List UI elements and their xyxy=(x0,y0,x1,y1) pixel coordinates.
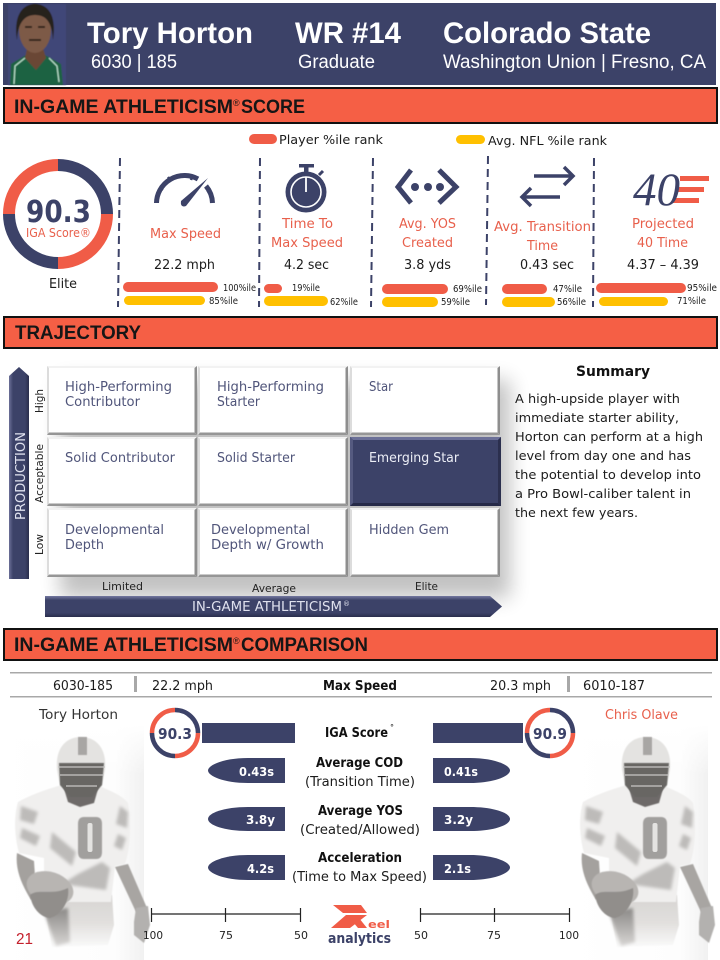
metric: time to max speed: 4.2 sec xyxy=(284,258,329,273)
trajectory matrix shadow xyxy=(60,380,510,598)
heading: in-game athleticism comparison: IN-GAME ATHLETICISM xyxy=(14,635,233,656)
metric: projected 40 time: 95%ile xyxy=(687,283,717,294)
player illustration: left xyxy=(15,737,150,947)
small donut: Tory Horton 90.3: 90.3 xyxy=(158,725,192,743)
metric: average transition time: 47%ile xyxy=(553,284,582,295)
summary xyxy=(515,364,703,520)
logo: reel analytics xyxy=(328,905,391,947)
summary: immediate starter ability, xyxy=(515,410,679,425)
cell: solid contributor: Solid Contributor xyxy=(65,451,176,466)
metric: projected 40 time: 4.37 – 4.39 xyxy=(627,258,699,273)
cell: solid contributor xyxy=(47,437,197,506)
class year: Graduate xyxy=(298,52,375,73)
comparison metric labels: ° xyxy=(390,723,394,732)
heading: in-game athleticism score xyxy=(4,88,717,123)
comparison bars: left player: 4.2s xyxy=(247,861,274,876)
player illustration: right xyxy=(580,737,715,947)
metric: projected 40 time: 40 Time xyxy=(637,236,688,251)
summary: a Pro Bowl-caliber talent in xyxy=(515,486,691,501)
comparison bars: left player xyxy=(208,758,285,880)
y axis tier labels: Low xyxy=(34,534,46,555)
cell: hidden gem xyxy=(350,508,500,577)
comparison metric labels: (Time to Max Speed) xyxy=(292,870,427,885)
heading: trajectory: TRAJECTORY xyxy=(15,323,141,344)
metric: average YOS created: 3.8 yds xyxy=(404,258,451,273)
metric: projected 40 time: Projected xyxy=(632,217,694,232)
player headshot xyxy=(8,4,66,85)
comparison header row xyxy=(10,672,712,698)
comparison metric labels: Average COD xyxy=(316,756,403,771)
metric: max speed: Max Speed xyxy=(150,227,221,242)
metric: average YOS created: 59%ile xyxy=(441,297,470,308)
right percentile axis xyxy=(414,908,579,942)
left percentile axis: 50 xyxy=(294,930,308,942)
cell: emerging star (highlighted): Emerging Star xyxy=(369,451,460,466)
x axis arrow: in-game athleticism xyxy=(45,596,502,617)
trajectory matrix xyxy=(47,366,501,577)
cell: developmental depth: Developmental xyxy=(65,523,164,538)
left percentile axis: 75 xyxy=(219,930,233,942)
y axis tier labels: High xyxy=(34,389,46,413)
cell: high-performing contributor xyxy=(47,366,197,435)
cell: star: Star xyxy=(369,380,394,395)
heading: in-game athleticism comparison xyxy=(4,629,717,660)
player names: Tory Horton xyxy=(38,708,118,723)
comparison metric labels: Average YOS xyxy=(318,804,403,819)
cell: solid starter: Solid Starter xyxy=(217,451,296,466)
metric: average transition time xyxy=(494,167,591,308)
x axis tier labels: Elite xyxy=(415,581,438,593)
metric: time to max speed: 19%ile xyxy=(292,283,320,294)
comparison bars: right player: 3.2y xyxy=(444,812,473,827)
cell: developmental depth xyxy=(47,508,197,577)
player name: Tory Horton xyxy=(87,17,253,50)
metric: average transition time: 56%ile xyxy=(557,297,586,308)
comparison bars: right player: 0.41s xyxy=(444,764,478,779)
cell: developmental depth with growth: Developmental xyxy=(211,523,310,538)
player names xyxy=(38,708,678,723)
metric: average transition time: 0.43 sec xyxy=(520,258,574,273)
cell: developmental depth with growth: Depth w/ Growth xyxy=(211,538,324,553)
page number: 21 xyxy=(16,931,33,948)
logo: reel analytics: analytics xyxy=(328,931,391,947)
icon: stopwatch xyxy=(286,164,326,212)
IGA score bars xyxy=(202,723,523,743)
comparison metric labels: Acceleration xyxy=(318,851,402,866)
y axis tier labels: Acceptable xyxy=(34,444,46,503)
comparison header row: 6030-185 xyxy=(53,679,113,694)
small donut: Chris Olave 90.9 xyxy=(523,706,577,760)
IGA score donut xyxy=(9,165,107,292)
icon: 40 with speed lines: 40 xyxy=(633,164,680,216)
x axis tier labels xyxy=(102,581,438,595)
comparison header row: 22.2 mph xyxy=(152,679,213,694)
metric: projected 40 time xyxy=(596,164,717,307)
icon: speedometer xyxy=(156,175,212,206)
right percentile axis: 50 xyxy=(414,930,428,942)
left percentile axis xyxy=(143,908,308,942)
summary: level from day one and has xyxy=(515,448,691,463)
header banner xyxy=(3,3,716,85)
comparison header row: 20.3 mph xyxy=(490,679,551,694)
metric: average YOS created xyxy=(382,170,482,308)
cell: star xyxy=(350,366,500,435)
metric: average YOS created: Avg. YOS xyxy=(399,217,456,232)
legend: Player %ile rank xyxy=(279,132,384,147)
legend: Avg. NFL %ile rank xyxy=(488,133,608,148)
left percentile axis: 100 xyxy=(143,930,163,942)
cell: developmental depth with growth xyxy=(198,508,348,577)
position: WR #14 xyxy=(295,17,401,50)
right percentile axis: 75 xyxy=(487,930,501,942)
small donut: Chris Olave 90.9: 90.9 xyxy=(533,725,567,743)
comparison bars: left player: 3.8y xyxy=(246,812,275,827)
heading: in-game athleticism score: ® xyxy=(233,98,240,108)
right percentile axis: 100 xyxy=(559,930,579,942)
IGA score donut: IGA Score® xyxy=(26,226,91,240)
cell: high-performing contributor: High-Performing xyxy=(65,380,172,395)
x axis tier labels: Average xyxy=(252,583,296,595)
cell: emerging star (highlighted) xyxy=(350,437,501,506)
icon: 40 with speed lines xyxy=(633,164,709,216)
metric: time to max speed: Max Speed xyxy=(271,236,343,251)
cell: developmental depth: Depth xyxy=(65,538,104,553)
heading: in-game athleticism comparison: COMPARISON xyxy=(241,635,368,656)
summary: Horton can perform at a high xyxy=(515,429,703,444)
logo: reel analytics: eel xyxy=(368,918,390,931)
comparison header row: Max Speed xyxy=(323,679,397,694)
x axis tier labels: Limited xyxy=(102,581,143,593)
x axis arrow: in-game athleticism: ® xyxy=(343,600,350,608)
metric: projected 40 time: 71%ile xyxy=(677,296,706,307)
icon: transition arrows xyxy=(522,167,573,206)
comparison bars: right player: 2.1s xyxy=(444,861,471,876)
metric: max speed: 22.2 mph xyxy=(154,258,215,273)
comparison metric labels: (Created/Allowed) xyxy=(300,823,420,838)
comparison metric labels: (Transition Time) xyxy=(305,775,415,790)
metric: average YOS created: Created xyxy=(402,236,453,251)
height and weight: 6030 | 185 xyxy=(91,52,177,73)
metric: average transition time: Avg. Transition xyxy=(494,220,591,235)
small donut: Tory Horton 90.3 xyxy=(148,706,202,760)
IGA score donut: 90.3 xyxy=(26,195,91,230)
comparison metric labels: IGA Score xyxy=(325,726,388,741)
y axis arrow: production: PRODUCTION xyxy=(14,432,29,520)
y axis tier labels xyxy=(34,389,46,555)
heading: in-game athleticism score: IN-GAME ATHLETICISM xyxy=(14,97,233,118)
cell: solid starter xyxy=(198,437,348,506)
heading: in-game athleticism comparison: ® xyxy=(233,636,240,646)
comparison bars: left player: 0.43s xyxy=(239,764,274,779)
cell: high-performing starter: Starter xyxy=(217,395,261,410)
player names: Chris Olave xyxy=(605,708,678,723)
IGA score donut: Elite xyxy=(49,277,77,292)
cell: high-performing starter xyxy=(198,366,348,435)
metric: time to max speed: Time To xyxy=(281,217,333,232)
summary: A high-upside player with xyxy=(515,391,680,406)
metric: average transition time: Time xyxy=(526,239,558,254)
summary: the potential to develop into xyxy=(515,467,701,482)
comparison header row: 6010-187 xyxy=(583,679,645,694)
metric: time to max speed xyxy=(264,164,358,308)
heading: in-game athleticism score: SCORE xyxy=(241,97,305,118)
metric: time to max speed: 62%ile xyxy=(330,297,358,308)
high school and hometown: Washington Union | Fresno, CA xyxy=(443,52,706,73)
comparison backdrop right xyxy=(570,725,708,960)
metric: max speed xyxy=(123,175,256,307)
y axis arrow: production xyxy=(9,367,29,579)
dashed column dividers xyxy=(118,156,594,307)
comparison bars: right player xyxy=(433,758,510,880)
comparison backdrop left xyxy=(0,725,144,960)
summary: the next few years. xyxy=(515,505,638,520)
legend xyxy=(249,132,608,148)
heading: trajectory xyxy=(4,317,717,348)
cell: high-performing contributor: Contributor xyxy=(65,395,141,410)
metric: average YOS created: 69%ile xyxy=(453,284,482,295)
metric: max speed: 100%ile xyxy=(223,283,256,294)
cell: high-performing starter: High-Performing xyxy=(217,380,324,395)
summary: Summary xyxy=(576,364,651,380)
x axis arrow: in-game athleticism: IN-GAME ATHLETICISM xyxy=(192,600,342,615)
icon: chevrons and dots xyxy=(398,170,456,203)
school: Colorado State xyxy=(443,17,651,50)
comparison metric labels xyxy=(292,723,427,885)
cell: hidden gem: Hidden Gem xyxy=(369,523,449,538)
metric: max speed: 85%ile xyxy=(209,296,238,307)
